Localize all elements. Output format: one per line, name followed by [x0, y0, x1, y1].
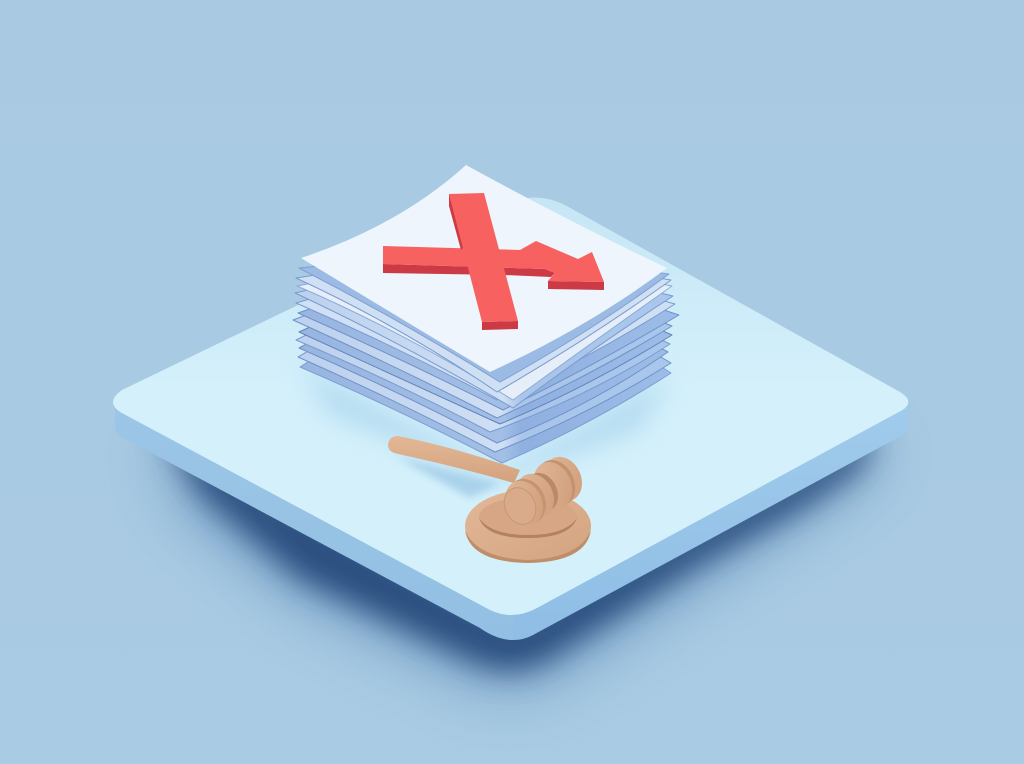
cross bar top face — [449, 193, 518, 322]
paper stack shadow on platform — [300, 365, 672, 482]
arrow stroke top face — [383, 241, 604, 282]
sound block — [465, 490, 591, 562]
cross bar shaded sides — [449, 194, 518, 330]
arrow stroke shaded side — [383, 264, 555, 277]
platform side edge: right — [513, 403, 909, 640]
platform — [113, 198, 909, 640]
platform drop shadow — [150, 430, 890, 690]
platform top surface — [113, 198, 908, 615]
neck — [520, 468, 564, 516]
far cap — [537, 451, 589, 507]
top sheet — [301, 165, 667, 372]
red X with downward arrow — [383, 193, 604, 330]
head — [498, 451, 589, 531]
handle — [388, 436, 520, 483]
paper stack — [293, 165, 679, 463]
gavel shadow — [395, 456, 500, 498]
near collar — [509, 468, 561, 524]
gavel — [388, 436, 591, 563]
lower sheets — [300, 250, 671, 463]
end face — [498, 482, 542, 530]
platform side edge: left — [115, 400, 513, 640]
